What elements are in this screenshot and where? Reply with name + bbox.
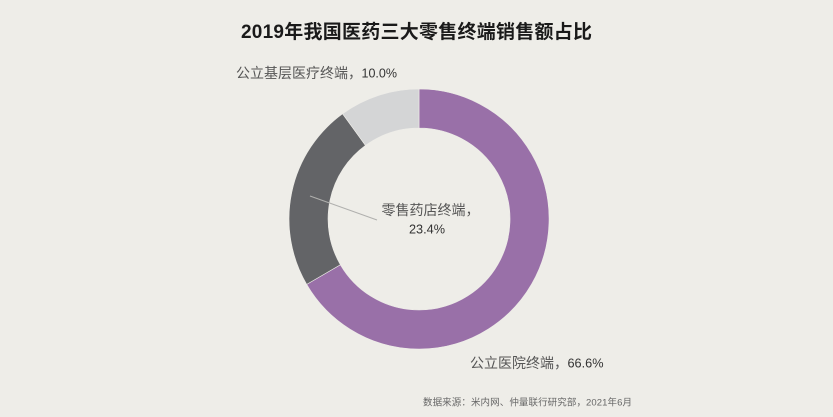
value: public hospital share: 66.6% (568, 356, 604, 370)
donut chart (289, 89, 549, 349)
value: retail pharmacy share: 23.4% (409, 222, 445, 236)
label: primary care terminals: 公立基层医疗终端， (236, 65, 362, 81)
source note: 数据来源：米内网、仲量联行研究部，2021年6月 (423, 396, 632, 408)
segment: primary care terminals 10.0% (343, 89, 419, 145)
value: primary care share: 10.0% (362, 66, 397, 80)
leader line: retail pharmacy (310, 196, 377, 220)
label: retail pharmacy terminals: 零售药店终端， (382, 202, 480, 218)
label: public hospital terminals: 公立医院终端， (470, 355, 568, 371)
segment: public hospital terminals 66.6% (307, 89, 549, 349)
title: 2019年我国医药三大零售终端销售额占比 (241, 20, 592, 43)
segment: retail pharmacy terminals 23.4% (289, 114, 366, 284)
